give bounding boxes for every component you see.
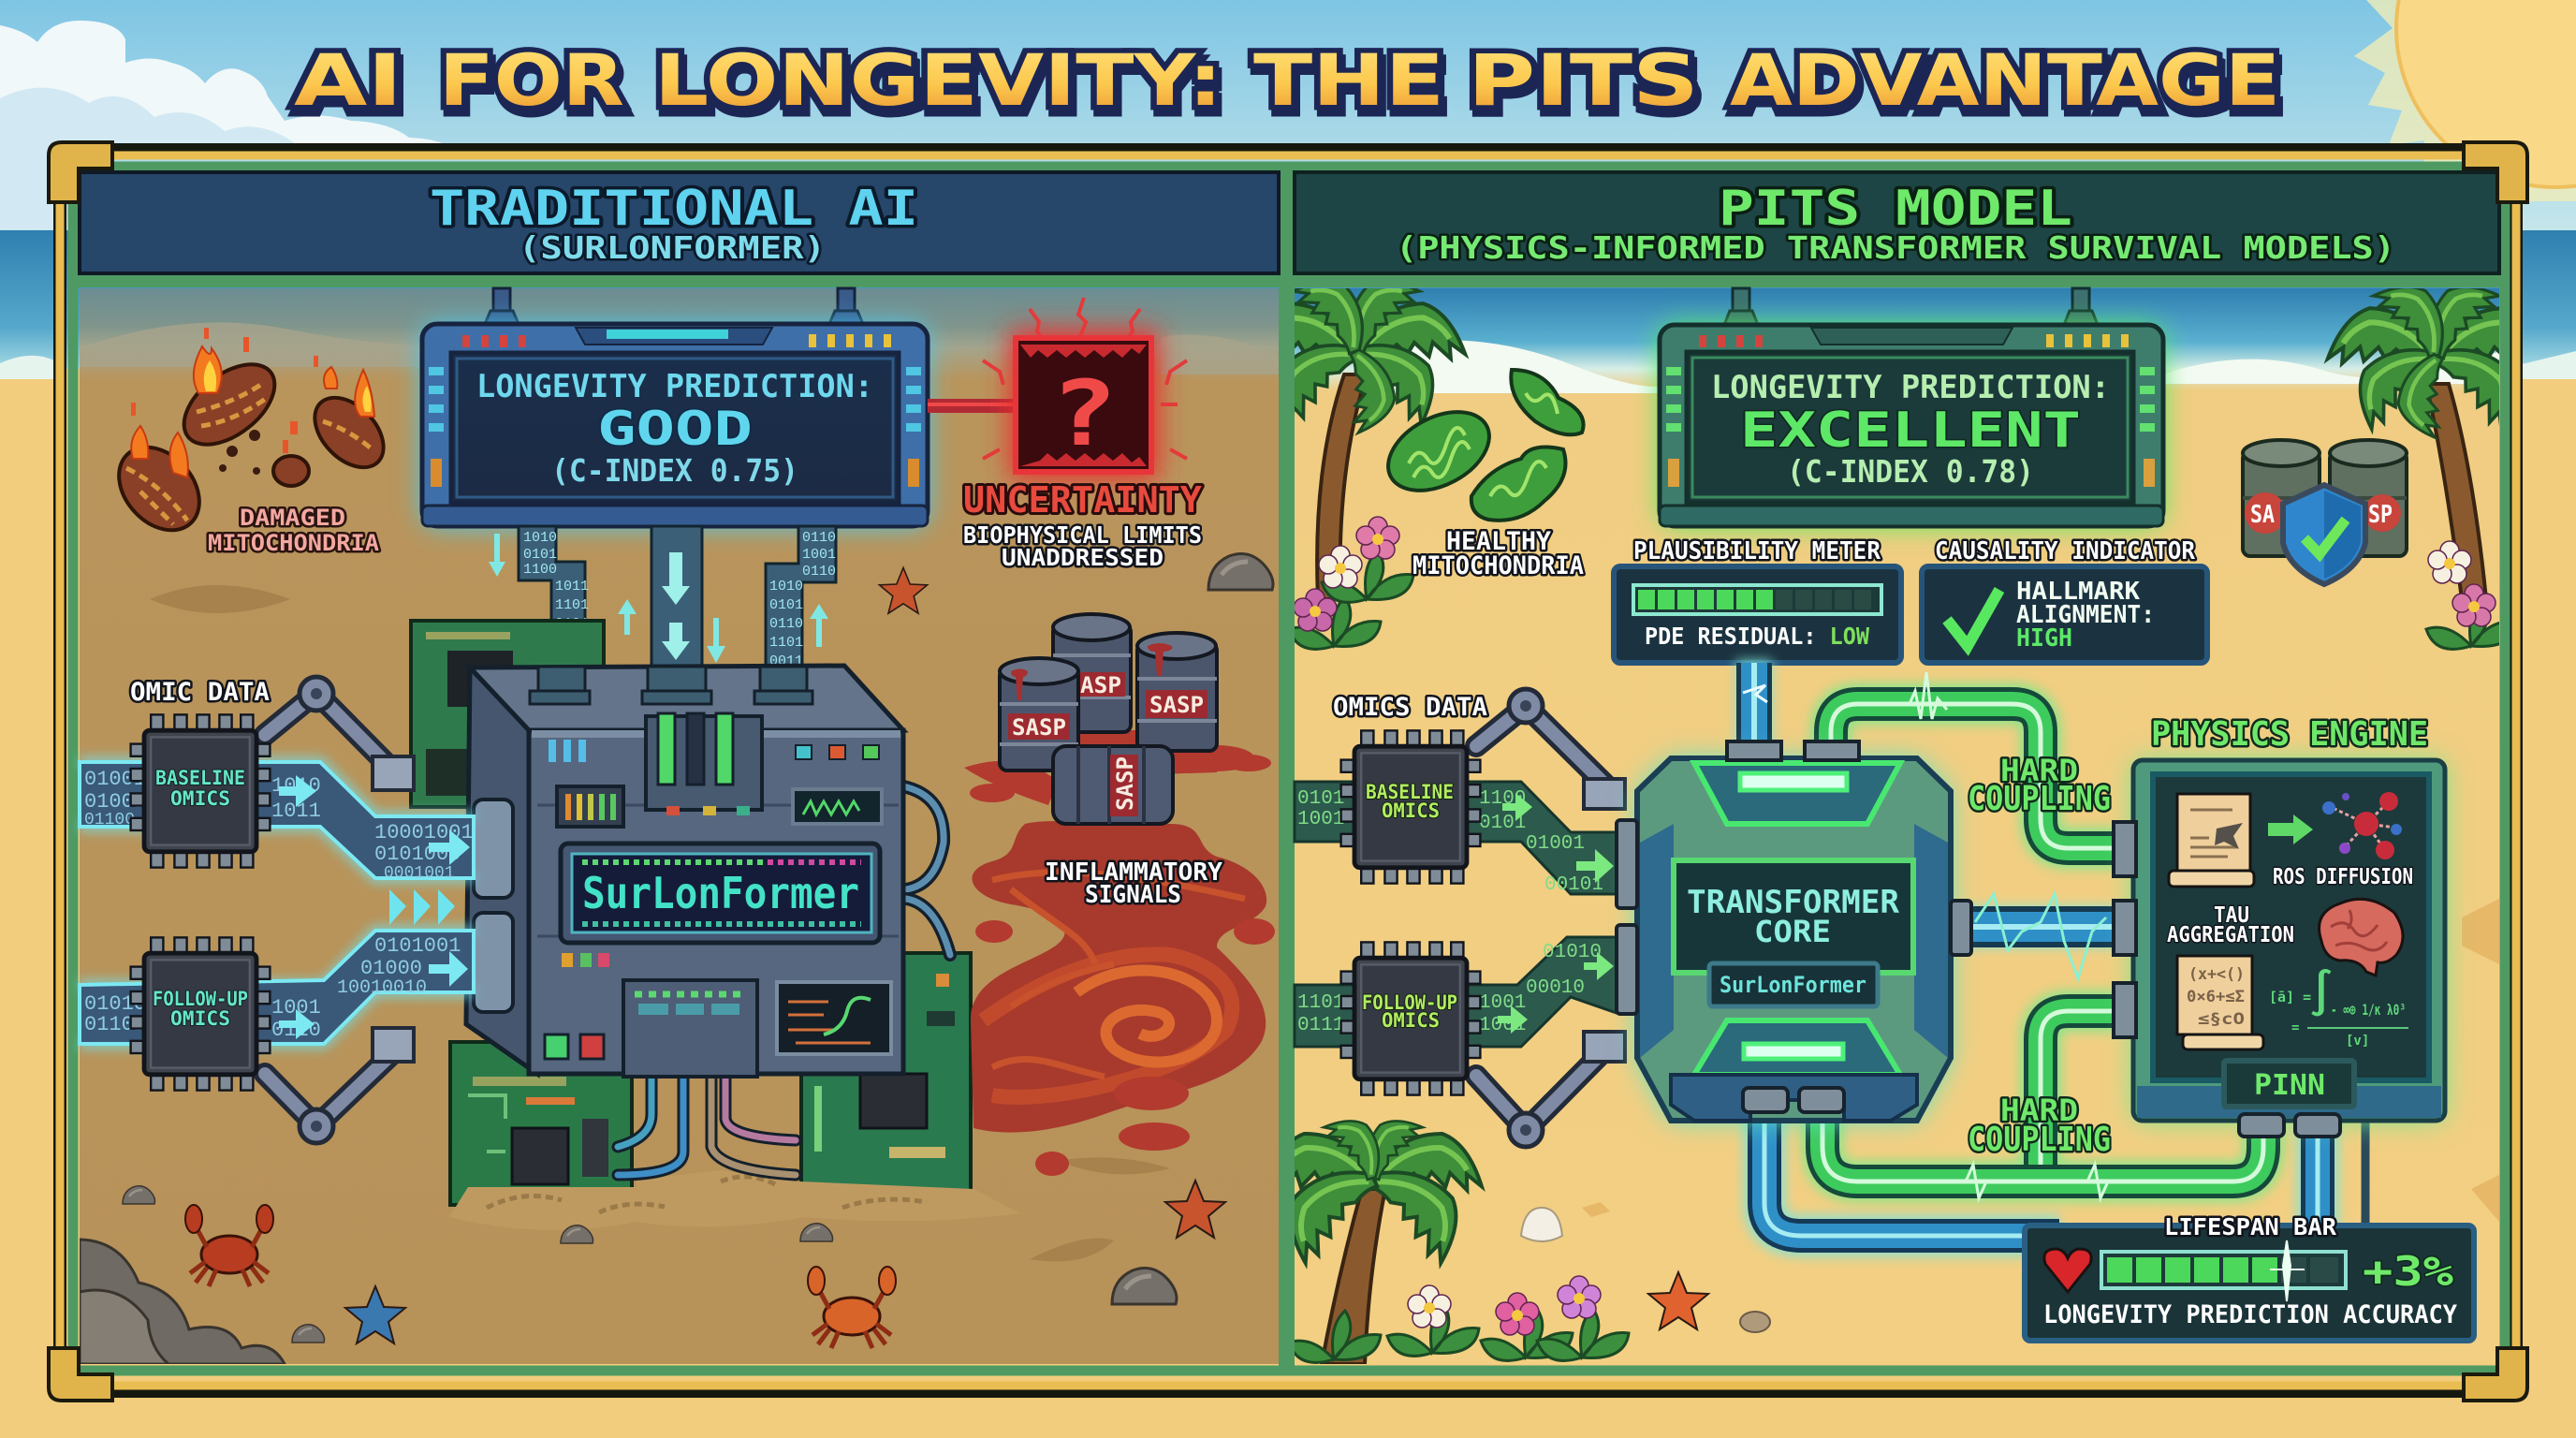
icon: hanging poles, right monitor [1724,288,2098,325]
data stream: follow-up omics: 1001 [271,996,321,1020]
label: hard coupling lower [1968,1093,2111,1159]
icon: robot arm lower [265,1028,414,1143]
data stream: baseline omics: 01001 [84,790,146,814]
text: transformer core [1687,884,1900,949]
chart: lifespan progress bar [2101,1240,2346,1301]
icon: hanging poles, left monitor [485,288,863,324]
icon: check mark [1947,590,1999,646]
data stream: PITS baseline omics: 01001 [1526,833,1585,855]
connector: left data column: 1100 [523,562,557,578]
label: hard coupling lower: HARD [2000,1093,2078,1128]
icon: healthy mitochondria [1375,370,1584,580]
data stream: follow-up omics: 0101001 [374,934,461,958]
label: PINN [2224,1061,2354,1107]
connector: left data column: 0110 [555,653,589,669]
icon: pebble [1740,1312,1770,1332]
icon: status LEDs [796,745,879,759]
icon: bottom port [623,980,757,1077]
label: omic data: OMIC DATA [130,678,270,707]
title [294,38,2280,122]
data stream: PITS baseline omics: 0101 [1297,788,1344,810]
chip: PITS follow-up omics: OMICS [1382,1009,1440,1032]
data stream: baseline omics: 10001001 [374,821,474,844]
data stream: PITS baseline omics: 00101 [1544,874,1603,896]
label: inflammatory signals: INFLAMMATORY [1045,858,1222,887]
label: causality indicator: CAUSALITY INDICATOR [1935,537,2195,565]
title: LONGEVITY: [654,38,1222,122]
data stream: baseline omics: 0001001 [384,864,455,883]
icon: orange starfish lower [1165,1181,1225,1238]
icon: red crab [185,1205,273,1286]
panel: causality indicator [1922,537,2207,663]
title: ADVANTAGE [1730,38,2280,122]
icon: palm top right [2323,288,2499,594]
data stream: follow-up omics [80,931,474,1044]
barrel: back [1053,614,1131,732]
label: SurLonFormer tag: SurLonFormer [1720,972,1866,998]
decor: left beach creatures and rocks [123,554,1273,1348]
icon: blue lights [549,740,586,762]
chip: baseline omics [131,714,270,868]
panel: traditional AI header [80,172,1279,273]
connector: left data column: 1011 [555,579,589,594]
icon: barrels with shield [2243,440,2407,584]
barrel: left: SASP [1012,714,1066,741]
label: hard coupling lower: COUPLING [1968,1121,2111,1159]
connector: left data column: 1010 [523,530,557,546]
icon: flowers top left [1289,517,1413,649]
pipe: lower hard coupling [1822,1011,2263,1198]
data stream: PITS baseline omics: 0101 [1479,813,1526,834]
icon: uncertainty question block [983,298,1187,479]
chip: baseline omics: OMICS [170,787,230,810]
chip: PITS follow-up omics [1341,942,1480,1095]
text: hallmark alignment high [2016,578,2155,653]
text: c-index 0.75: (C-INDEX 0.75) [551,452,798,489]
icon: damaged mitochondria [103,328,397,556]
icon: sand mounds [449,1170,1020,1230]
chip: follow-up omics [131,937,270,1091]
barrel: right [1137,633,1217,751]
label: hard coupling upper: COUPLING [1968,780,2111,818]
data stream: PITS baseline omics: 1100 [1479,788,1526,810]
icon: bottom flowers and bushes [1289,1276,1629,1362]
icon: PITS robot arm lower [1476,1032,1625,1147]
data stream: PITS baseline omics: 1001 [1297,809,1344,830]
icon: robot arm upper [265,677,414,790]
connector: right data column: 0101 [769,597,803,613]
icon: core ports [1617,741,1971,1112]
icon: power buttons [545,1034,604,1059]
heading: physics engine: PHYSICS ENGINE [2151,715,2428,754]
icon: sun [2354,0,2576,201]
text: rating excellent: EXCELLENT [1740,403,2081,459]
data stream: PITS follow-up omics: 1101 [1297,992,1344,1014]
panel: PITS model header [1295,172,2499,273]
text: biophysical limits unaddressed: BIOPHYSICAL LIMITS [963,521,1202,549]
text: PDE residual low: PDE RESIDUAL: LOW [1645,623,1870,650]
glow: pipes [1754,660,2318,1236]
title: PITS [1468,38,1699,122]
icon: base [1671,1075,1917,1121]
heading: PITS model: PITS MODEL [1719,181,2072,237]
circuit board: bottom left [450,1042,632,1205]
icon: flowers top right [2424,540,2499,651]
connector: right data column: 0110 [769,616,803,632]
connector: right data column: 0011 [769,653,803,669]
text: transformer core: CORE [1754,914,1831,949]
text: longevity prediction accuracy: LONGEVITY PREDICTION ACCURACY [2043,1300,2458,1329]
data stream: baseline omics: 01001 [84,768,146,791]
connector: left data column: 1010 [555,635,589,651]
title: FOR [439,38,624,122]
label: plausibility meter: PLAUSIBILITY METER [1633,537,1881,565]
label: lifespan bar: LIFESPAN BAR [2164,1213,2337,1240]
subheading: SurLonFormer: (SURLONFORMER) [519,229,826,266]
label: healthy mitochondria: HEALTHY [1446,527,1552,556]
connector: left data column [519,526,589,672]
chip: PITS baseline omics: OMICS [1382,800,1440,822]
chip: follow-up omics: OMICS [170,1007,230,1030]
connector: left data column: 0101 [523,547,557,563]
icon: side ports [2114,822,2340,1137]
circuit board: back [411,621,604,807]
data stream: follow-up omics: 0110 [271,1019,321,1042]
icon: scroll lower: 0×6+≤Σ [2187,988,2245,1006]
icon: equation: = [2291,1020,2299,1035]
panel: plausibility meter [1614,537,1901,663]
icon: rocks [123,554,1273,1343]
icon: waveform screen [793,789,882,824]
data stream: PITS follow-up omics: 00010 [1526,977,1585,999]
data stream: PITS follow-up omics [1295,937,1617,1047]
label: tau aggregation: TAU [2214,903,2249,928]
text: plus three percent: +3% [2363,1248,2454,1296]
label: inflammatory signals [1045,858,1222,909]
data stream: baseline omics [80,762,474,883]
data stream: follow-up omics: 01101 [84,1013,146,1036]
text: c-index 0.78: (C-INDEX 0.78) [1787,453,2034,490]
icon: equation [2269,967,2408,1049]
label: hard coupling upper [1968,753,2111,818]
barrel: tipped over: SASP [1112,756,1138,811]
icon: center vents [646,713,762,815]
chart: inflammatory blood pool [964,730,1275,1176]
connector: right data column: 1101 [769,635,803,651]
label: PINN: PINN [2254,1069,2325,1102]
icon: orange starfish [879,567,928,613]
icon: uncertainty connector [928,399,1016,413]
icon: heart [2044,1249,2091,1292]
text: question mark: ? [1050,361,1118,466]
icon: ROS molecule [2322,792,2402,859]
pipe: blue lower link [1764,1100,2365,1236]
chip: PITS follow-up omics: FOLLOW-UP [1362,991,1457,1014]
label: omics data: OMICS DATA [1333,693,1487,722]
text: longevity prediction: LONGEVITY PREDICTION: [476,368,873,405]
icon: scroll lower: ≤§cO [2198,1010,2245,1029]
label: hard coupling upper: HARD [2000,753,2078,788]
label: ROS diffusion: ROS DIFFUSION [2273,865,2413,889]
title: AI [294,38,402,122]
data stream: PITS baseline omics [1295,782,1617,896]
icon: upper light housing [1694,763,1900,824]
data stream: baseline omics: 1010 [271,774,321,798]
connector: right data column [766,526,836,672]
module: transformer core [1617,741,1971,1121]
text: hallmark alignment high: HALLMARK [2016,578,2140,606]
connector: right data column: 0110 [802,564,836,580]
icon: pale arrows [489,534,828,663]
chip: baseline omics: BASELINE [155,767,245,789]
text: hallmark alignment high: ALIGNMENT: [2016,601,2155,629]
label: tau aggregation [2167,903,2294,947]
icon: palm top left [1295,288,1470,601]
icon: small LEDs [562,953,609,967]
icon: orange crab [808,1267,896,1348]
connector: center data column [651,526,702,672]
monitor: longevity prediction excellent [1660,325,2163,526]
icon: equation: [ā] = [2269,989,2311,1005]
heading: traditional AI: TRADITIONAL AI [430,181,918,237]
icon: palm bottom left [1295,1120,1486,1364]
barrel: right: SASP [1149,692,1204,718]
icon: equation: [v] [2346,1034,2369,1049]
icon: clouds [0,21,451,229]
icon: barrels with shield: SA [2250,501,2275,529]
icon: core screen [1674,860,1913,973]
data stream: PITS follow-up omics: 01010 [1543,942,1602,963]
barrel: back: ASP [1080,672,1121,698]
text: uncertainty: UNCERTAINTY [963,479,1202,521]
chip: PITS baseline omics [1341,730,1480,884]
icon: side ports [474,800,513,1012]
data stream: baseline omics: 0101000 [374,843,461,866]
panel: traditional AI scene [80,288,1279,1364]
icon: scroll lower: (x+<() [2188,965,2245,984]
icon: PITS robot arm upper [1476,689,1625,809]
connector: right data column: 0110 [802,530,836,546]
monitor: longevity prediction good [422,324,928,526]
label: damaged mitochondria [208,505,380,556]
data stream: PITS follow-up omics: 0111 [1297,1015,1344,1036]
data stream: PITS follow-up omics: 1001 [1479,1015,1526,1036]
pipe: blue vertical to meter [1743,663,1767,749]
connector: right data column: 1001 [802,547,836,563]
label: healthy mitochondria: MITOCHONDRIA [1412,551,1584,580]
icon: barrels with shield: SP [2368,501,2393,529]
pipe: upper hard coupling [1831,672,2117,848]
server: SurLonFormer machine [466,666,903,1077]
chip: PITS baseline omics: BASELINE [1366,781,1454,803]
barrels: SASP [1000,614,1217,824]
label: SurLonFormer tag [1709,963,1878,1006]
data stream: follow-up omics: 10010010 [337,977,427,999]
icon: brain [2320,899,2403,976]
text: longevity prediction: LONGEVITY PREDICTION: [1711,369,2110,406]
title: THE [1253,38,1444,122]
icon: chevron arrows [389,889,455,925]
icon: blue starfish [345,1286,405,1343]
panel: lifespan bar [2025,1213,2474,1341]
circuit board: bottom right [801,953,971,1193]
text: rating good: GOOD [597,402,753,456]
panel: physics engine [2114,760,2445,1137]
icon: scroll lower [2177,956,2263,1049]
data stream: baseline omics: 1011 [271,800,321,823]
label: damaged mitochondria: MITOCHONDRIA [208,530,380,556]
connector: right data column: 1010 [769,579,803,594]
pipe: center waveform link [1961,894,2117,978]
connector: left data column: 1101 [555,597,589,613]
icon: equation: ∫ [2308,967,2334,1018]
label: healthy mitochondria [1412,527,1584,580]
text: SurLonFormer: SurLonFormer [582,868,859,918]
data stream: follow-up omics: 01000 [360,957,422,980]
icon: equation: - ∞⊕ 1/κ λ0³ [2331,1001,2406,1019]
text: hallmark alignment high: HIGH [2016,624,2072,653]
data stream: follow-up omics: 01010 [84,992,146,1016]
icon: top sockets [530,667,812,704]
data stream: PITS follow-up omics: 1001 [1479,992,1526,1014]
icon: shell [1521,1208,1562,1241]
chip: follow-up omics: FOLLOW-UP [153,988,248,1010]
icon: scroll upper [2169,794,2254,887]
data stream: baseline omics: 01100 [84,811,135,829]
icon: SurLonFormer display [561,844,880,943]
text: biophysical limits unaddressed: UNADDRESSED [1002,544,1164,571]
subheading: physics-informed transformer survival models: (PHYSICS-INFORMED TRANSFORMER SURVIVAL MODELS) [1396,229,2395,266]
text: transformer core: TRANSFORMER [1687,884,1900,921]
panel: PITS scene [1295,288,2499,1221]
icon: rock pile [80,1240,285,1364]
text: biophysical limits unaddressed [963,521,1202,571]
cables: under server [618,786,950,1175]
label: damaged mitochondria: DAMAGED [240,505,345,531]
glow: left data streams [80,762,474,1044]
icon: starfish right [1648,1272,1708,1329]
icon: gauge box [557,786,623,827]
label: tau aggregation: AGGREGATION [2167,923,2294,947]
icon: arrow to ROS [2268,814,2313,844]
barrel: tipped over [1053,746,1173,824]
barrel: left [1000,658,1078,770]
connector: left data column: 0101 [555,616,589,632]
icon: chart screen [777,982,891,1054]
icon: lower light housing [1694,1020,1900,1075]
label: inflammatory signals: SIGNALS [1085,881,1181,909]
